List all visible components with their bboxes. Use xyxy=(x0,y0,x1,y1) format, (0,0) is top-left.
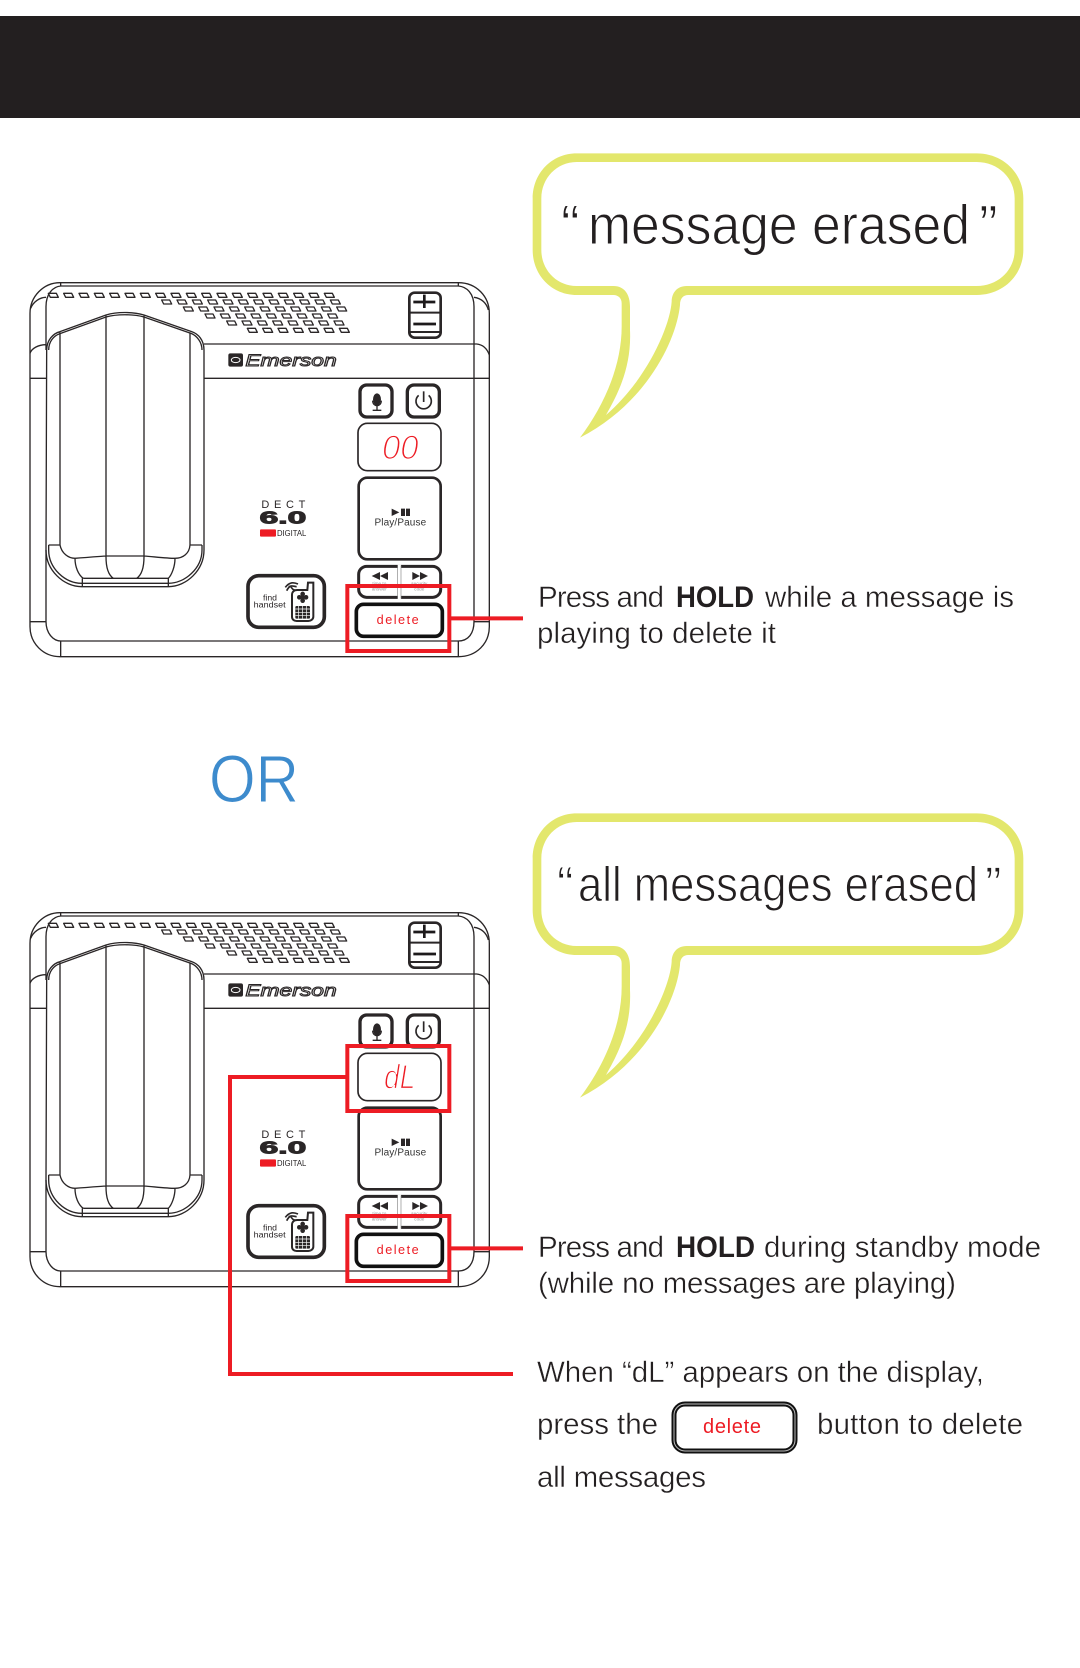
instruction: when dL appears press delete: button to delete xyxy=(817,1408,1023,1441)
find handset button: find xyxy=(263,1223,277,1233)
delete button xyxy=(356,604,442,636)
DECT 6.0 badge: DIGITAL xyxy=(277,1158,306,1168)
instruction: press and hold while playing: HOLD xyxy=(676,581,754,614)
speech bubble: all messages erased: “ xyxy=(557,857,573,912)
brand logo: Emerson xyxy=(245,981,337,1000)
phone base diagram 2 xyxy=(30,913,523,1287)
find handset button xyxy=(248,1206,324,1257)
instruction: press and hold while playing: playing to delete it xyxy=(537,617,776,650)
instruction: when dL appears press delete: press the xyxy=(537,1408,658,1441)
base outline xyxy=(30,913,489,1287)
DECT 6.0 badge: 6.0 xyxy=(260,1137,306,1157)
DECT 6.0 badge: DIGITAL xyxy=(277,528,306,538)
skip buttons: answer xyxy=(372,1216,387,1221)
volume button xyxy=(409,293,441,338)
instruction: press and hold while playing: while a message is xyxy=(764,581,1014,614)
delete button: delete xyxy=(377,1243,419,1257)
LED display showing dL: dL xyxy=(384,1059,415,1097)
instruction: press and hold during standby xyxy=(538,1231,1041,1300)
skip buttons: security xyxy=(411,581,428,586)
red highlight on display xyxy=(347,1046,449,1111)
play pause button: Play/Pause xyxy=(374,518,427,529)
skip buttons: code xyxy=(414,1216,425,1221)
speech bubble: message erased: ” xyxy=(979,193,998,256)
LED display showing dL xyxy=(358,1053,441,1101)
skip buttons: security xyxy=(411,1211,428,1216)
instruction: when dL appears press delete xyxy=(537,1356,1023,1494)
microphone button xyxy=(360,385,392,417)
LED display: 00 xyxy=(382,429,419,467)
instruction: press and hold during standby: HOLD xyxy=(676,1231,755,1264)
brand logo xyxy=(228,981,337,1000)
brand logo: Emerson xyxy=(245,351,337,370)
power button xyxy=(407,1015,439,1047)
skip buttons xyxy=(359,1195,441,1229)
handset cradle xyxy=(46,942,204,1217)
connector line xyxy=(449,1242,523,1254)
skip buttons: answer xyxy=(372,586,387,591)
speaker vents xyxy=(48,923,349,962)
find handset button: handset xyxy=(254,1230,286,1240)
skip buttons: time to xyxy=(372,1211,387,1216)
instruction: press and hold during standby: (while no messages are playing) xyxy=(538,1267,956,1300)
DECT 6.0 badge xyxy=(260,499,306,538)
delete button: delete xyxy=(377,613,419,627)
instruction: press and hold during standby: during standby mode xyxy=(764,1231,1041,1264)
instruction: press and hold while playing xyxy=(537,581,1014,650)
instruction: press and hold during standby: Press and xyxy=(538,1231,664,1264)
speech bubble: all messages erased: all messages erased xyxy=(578,857,978,912)
instruction: when dL appears press delete: When “dL” appears on the display, xyxy=(537,1356,984,1389)
skip buttons: code xyxy=(414,586,425,591)
play pause button xyxy=(359,478,441,559)
red highlight on delete button xyxy=(347,1216,449,1281)
skip buttons: time to xyxy=(372,581,387,586)
instruction: when dL appears press delete: all messages xyxy=(537,1461,706,1494)
OR label: OR xyxy=(209,742,299,817)
microphone button xyxy=(360,1015,392,1047)
title bar xyxy=(0,16,1080,118)
phone base diagram 1 xyxy=(30,283,523,657)
play pause button: Play/Pause xyxy=(374,1148,427,1159)
DECT 6.0 badge: DECT xyxy=(261,499,306,511)
red highlight on delete button xyxy=(347,586,449,651)
find handset button: handset xyxy=(254,600,286,610)
inline delete button icon xyxy=(674,1404,795,1451)
DECT 6.0 badge: 6.0 xyxy=(260,507,306,527)
speech bubble: message erased: message erased xyxy=(588,193,970,256)
inline delete button icon: delete xyxy=(703,1416,761,1438)
find handset button xyxy=(248,576,324,627)
play pause button xyxy=(359,1108,441,1189)
LED display xyxy=(358,423,441,471)
power button xyxy=(407,385,439,417)
delete button xyxy=(356,1234,442,1266)
instruction: press and hold while playing: Press and xyxy=(538,581,664,614)
brand logo xyxy=(228,351,337,370)
DECT 6.0 badge xyxy=(260,1129,306,1168)
speaker vents xyxy=(48,293,349,332)
speech bubble: message erased: “ xyxy=(561,193,580,256)
speech bubble: all messages erased: ” xyxy=(985,857,1001,912)
connector from display to instruction xyxy=(230,1077,513,1374)
DECT 6.0 badge: DECT xyxy=(261,1129,306,1141)
skip buttons xyxy=(359,565,441,599)
base outline xyxy=(30,283,489,657)
volume button xyxy=(409,923,441,968)
handset cradle xyxy=(46,312,204,587)
speech bubble: message erased xyxy=(533,153,1023,438)
connector line xyxy=(449,612,523,624)
find handset button: find xyxy=(263,593,277,603)
speech bubble: all messages erased xyxy=(533,813,1023,1098)
